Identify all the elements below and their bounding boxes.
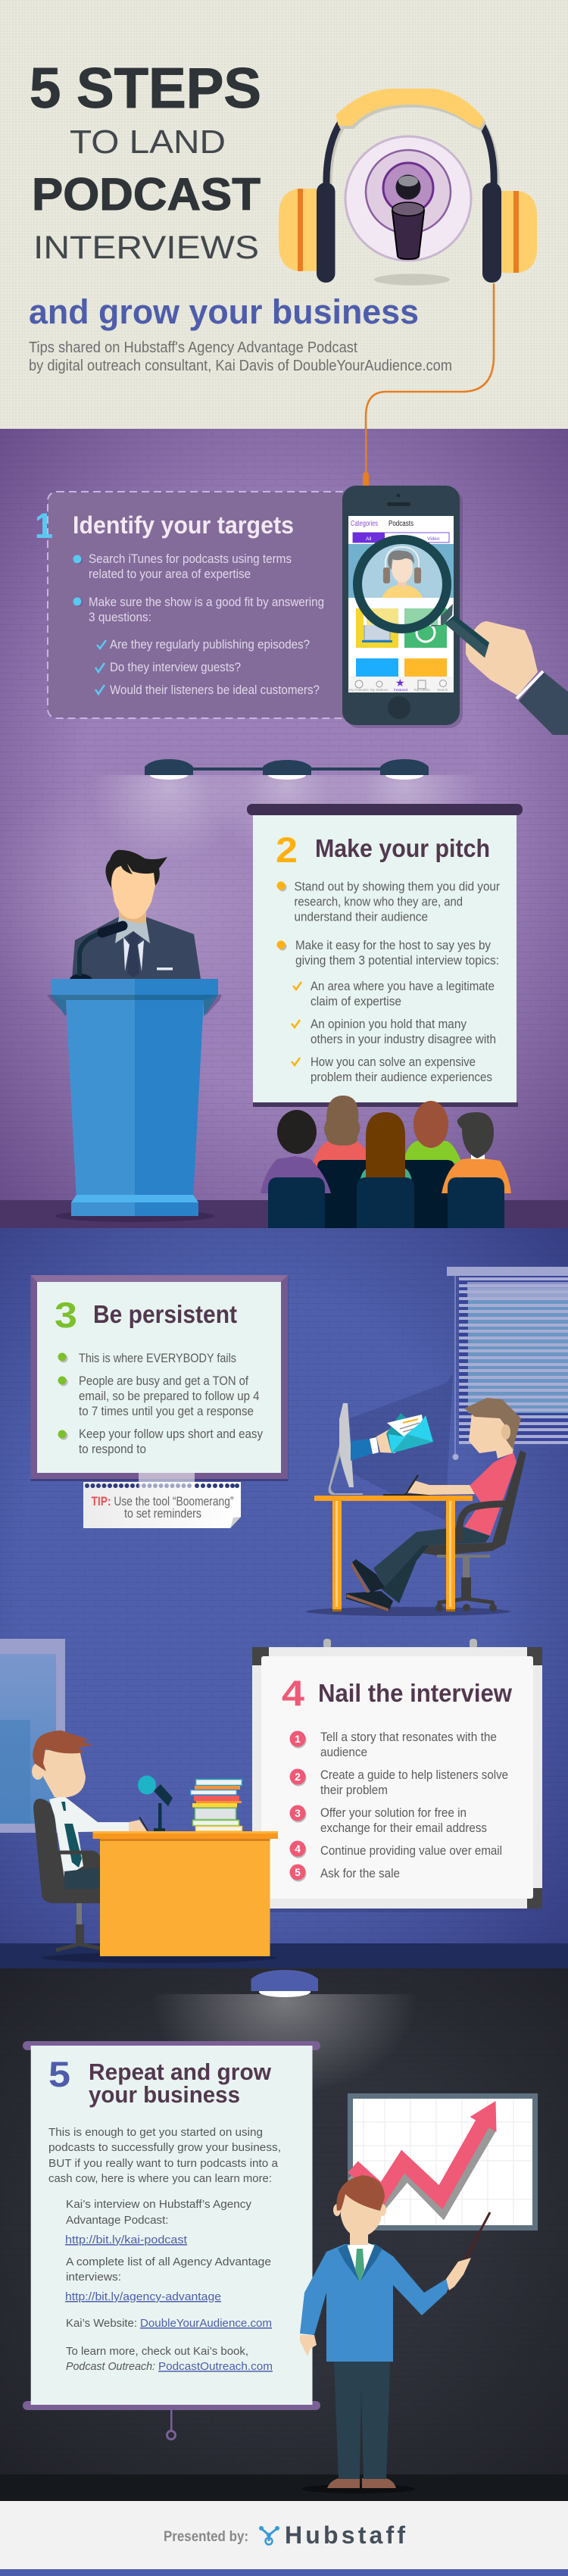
number 3: 3 [55, 1295, 77, 1335]
legs [381, 1542, 432, 1603]
bullet list: Stand out by showing them you did your [294, 879, 500, 894]
chair arm [459, 1504, 505, 1542]
icon: phone with podcast app: My Stations [370, 688, 389, 692]
hand and pen [129, 1820, 147, 1831]
heading: Be persistent [93, 1300, 237, 1328]
panel: step 1 identify your targets [35, 492, 351, 718]
number 4: 4 [282, 1673, 304, 1713]
icon: phone with podcast app: Search [437, 688, 448, 692]
bullet list: 3 questions: [89, 610, 151, 624]
resource links: Kai’s Website: [66, 2317, 137, 2330]
checklist: problem their audience experiences [311, 1070, 492, 1084]
icon: phone with podcast app: My Podcasts [349, 688, 370, 692]
callout: tip note: to set reminders [124, 1506, 201, 1521]
bullet list: to respond to [79, 1442, 146, 1456]
bullet list: Search iTunes for podcasts using terms [89, 552, 292, 566]
heading: Nail the interview [318, 1679, 512, 1707]
numbered list: audience [320, 1745, 367, 1759]
bullet list: Make it easy for the host to say yes by [295, 938, 491, 952]
desk [92, 1831, 278, 1956]
window on left wall [0, 1639, 65, 1833]
intro paragraph: This is enough to get you started on using [48, 2126, 263, 2139]
interviewer at desk [32, 1730, 278, 1963]
shirt [464, 1452, 517, 1536]
checklist [292, 979, 496, 1084]
shirt and tie [49, 1796, 129, 1877]
heading: Make your pitch [315, 834, 490, 862]
chair [33, 1799, 102, 1950]
panel: step 2 make your pitch [247, 804, 523, 1107]
podium [47, 979, 222, 1216]
wall: purple sections 1 and 2 [0, 429, 568, 1228]
stack of books [191, 1779, 242, 1831]
cable into phone [363, 429, 369, 489]
checklist: Would their listeners be ideal customers? [110, 683, 320, 697]
man at desk with monitor and envelope [306, 1374, 526, 1616]
numbered list: Create a guide to help listeners solve [320, 1768, 508, 1782]
desk [314, 1496, 473, 1612]
resource links: Kai’s interview on Hubstaff’s Agency [66, 2198, 251, 2211]
intro paragraph [48, 2126, 281, 2185]
intro paragraph: BUT if you really want to turn podcasts into a [48, 2157, 279, 2170]
chair seat and base [437, 1555, 490, 1558]
bullet list: understand their audience [294, 909, 428, 924]
microphone [138, 1776, 173, 1831]
bullet list [277, 879, 500, 968]
window with blinds [447, 1267, 568, 1460]
bullet list: This is where EVERYBODY fails [79, 1351, 236, 1365]
intro paragraph: podcasts to successfully grow your business, [48, 2141, 281, 2154]
numbered list [289, 1730, 508, 1882]
numbered list: 1 [295, 1733, 301, 1745]
header section [0, 0, 568, 429]
resource links [65, 2198, 273, 2373]
chart: growth arrow [348, 2093, 538, 2231]
intro text [29, 339, 452, 374]
checklist: claim of expertise [311, 994, 401, 1008]
resource links: To learn more, check out Kai’s book, [66, 2345, 248, 2358]
intro text: Tips shared on Hubstaff's Agency Advantage Podcast [29, 339, 357, 356]
icon: phone with podcast app: Categories [351, 520, 378, 528]
bullet list: research, know who they are, and [294, 894, 463, 909]
numbered list: exchange for their email address [320, 1821, 487, 1835]
presented by label: Presented by: [164, 2529, 248, 2545]
bullet list: Keep your follow ups short and easy [79, 1427, 263, 1441]
resource links: PodcastOutreach.com [158, 2360, 273, 2373]
numbered list: their problem [320, 1783, 388, 1797]
title: INTERVIEWS: INTERVIEWS [33, 230, 259, 266]
head [43, 1750, 86, 1797]
jacket [300, 2244, 449, 2362]
numbered list: 3 [295, 1807, 301, 1819]
head [469, 1405, 517, 1458]
lamps: three ceiling lights [104, 759, 470, 847]
resource links: http://bit.ly/kai-podcast [65, 2234, 188, 2246]
title: TO LAND: TO LAND [70, 123, 226, 161]
hand with envelope [351, 1413, 433, 1461]
resource links: A complete list of all Agency Advantage [66, 2256, 271, 2268]
icon: hand holding magnifier [357, 539, 568, 735]
intro paragraph: cash cow, here is where you can learn more: [48, 2172, 272, 2185]
panel: step 4 nail the interview [252, 1639, 542, 1912]
bullet list: related to your area of expertise [89, 567, 251, 581]
panel: step 3 be persistent [30, 1275, 288, 1481]
heading: your business [89, 2081, 240, 2108]
checklist: An opinion you hold that many [311, 1017, 467, 1031]
number 1: 1 [35, 505, 53, 546]
heading: Identify your targets [73, 511, 294, 539]
speaker at podium [47, 850, 222, 1222]
checklist: An area where you have a legitimate [311, 979, 495, 993]
icon: phone with podcast app: Podcasts [389, 520, 414, 528]
logo: Hubstaff: Hubstaff [285, 2521, 405, 2549]
checklist: Do they interview guests? [110, 660, 241, 674]
bullet list: giving them 3 potential interview topics: [295, 953, 499, 968]
wall: blue sections 3 and 4 [0, 1228, 568, 1968]
bullet list: to 7 times until you get a response [79, 1404, 254, 1418]
intro text: by digital outreach consultant, Kai Davis of DoubleYourAudience.com [29, 358, 452, 374]
resource links: http://bit.ly/agency-advantage [65, 2290, 221, 2303]
title: 5 STEPS: 5 STEPS [30, 56, 261, 120]
bullet list: email, so be prepared to follow up 4 [79, 1389, 259, 1403]
heading: Repeat and grow [89, 2059, 272, 2085]
checklist [95, 637, 320, 697]
shoes [352, 1559, 385, 1593]
monitor [329, 1446, 363, 1495]
checklist: others in your industry disagree with [311, 1032, 496, 1046]
bullet list [73, 552, 324, 624]
resource links: interviews: [66, 2271, 121, 2284]
icon: phone with podcast app: ★ [395, 677, 405, 689]
icon: phone with podcast app: All [366, 536, 372, 542]
title: PODCAST: PODCAST [32, 169, 261, 220]
numbered list: 2 [295, 1771, 301, 1783]
presenter with pointer [300, 2175, 490, 2493]
panel: step 5 repeat and grow [23, 2041, 320, 2440]
numbered list: Tell a story that resonates with the [320, 1730, 497, 1744]
heading [89, 2059, 272, 2108]
checklist: How you can solve an expensive [311, 1055, 476, 1069]
numbered list: 5 [295, 1866, 301, 1878]
resource links: Advantage Podcast: [66, 2214, 168, 2227]
audience [261, 1096, 511, 1228]
numbered list: Continue providing value over email [320, 1843, 502, 1858]
numbered list: 4 [295, 1843, 301, 1855]
footer [0, 2501, 568, 2576]
number 5: 5 [48, 2054, 70, 2094]
callout: tip note [83, 1473, 241, 1528]
numbered list: Ask for the sale [320, 1866, 400, 1880]
lamp with light beam [167, 1970, 403, 2081]
wall: dark section 5 [0, 1968, 568, 2501]
resource links: Podcast Outreach: [66, 2360, 155, 2373]
icon: phone with podcast app [342, 486, 463, 728]
icon: headphones with podcast logo [279, 89, 537, 429]
resource links: DoubleYourAudience.com [140, 2317, 272, 2330]
icon: phone with podcast app: Video [427, 536, 440, 542]
checklist: Are they regularly publishing episodes? [110, 637, 310, 652]
numbered list: Offer your solution for free in [320, 1805, 467, 1820]
bullet list [58, 1351, 263, 1456]
arm and tablet [383, 1494, 429, 1496]
head [350, 2224, 368, 2245]
bullet list: People are busy and get a TON of [79, 1374, 248, 1388]
number 2: 2 [276, 830, 298, 870]
chair back [423, 1450, 526, 1555]
icon: phone with podcast app: Top Charts [414, 688, 431, 692]
callout: tip note: TIP: Use the tool “Boomerang” [91, 1494, 234, 1508]
subtitle: and grow your business [29, 292, 419, 331]
icon: phone with podcast app: Featured [394, 688, 408, 692]
bullet list: Make sure the show is a good fit by answering [89, 595, 324, 609]
